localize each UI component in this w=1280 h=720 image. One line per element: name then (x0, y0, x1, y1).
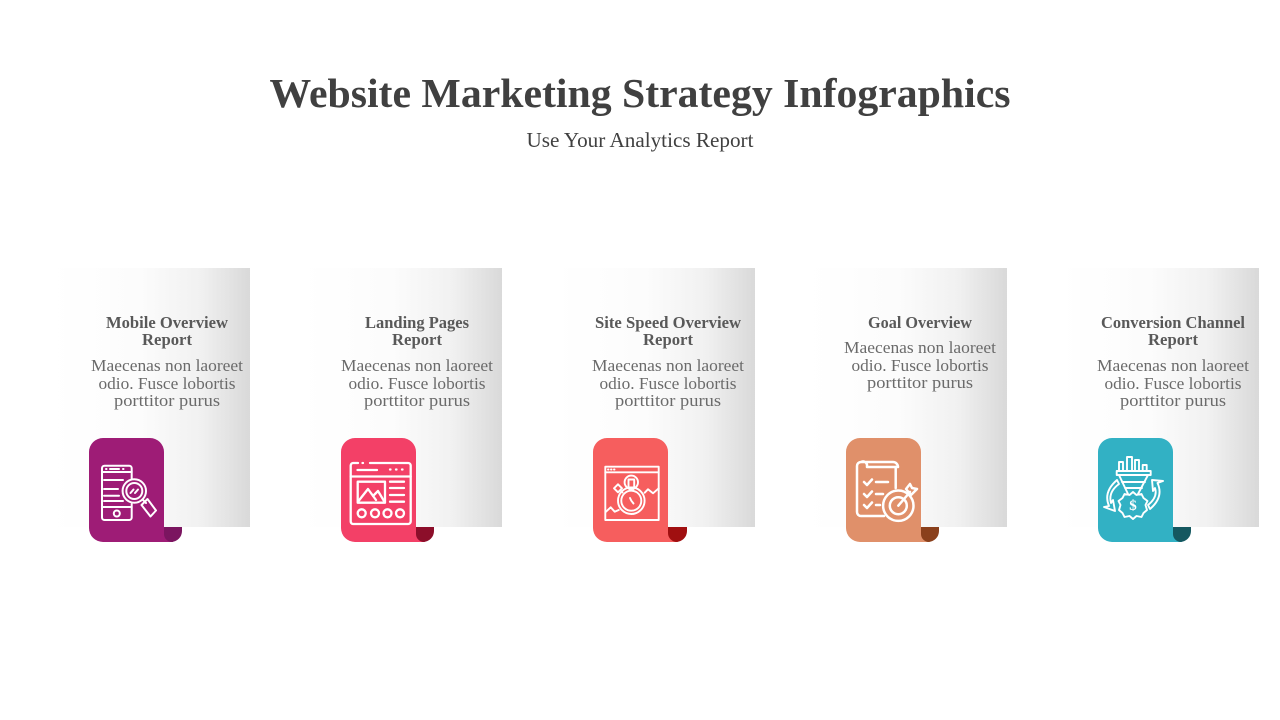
icon: checklist with target (857, 461, 917, 521)
curled tab (416, 527, 434, 542)
body text: Maecenas non laoreet (844, 338, 996, 357)
panel: site speed overview report (555, 268, 755, 542)
body text (341, 356, 493, 410)
heading (365, 313, 469, 349)
heading (106, 313, 229, 349)
body text: odio. Fusce lobortis (98, 374, 236, 393)
heading: Report (142, 330, 192, 349)
body text (592, 356, 744, 410)
body text: odio. Fusce lobortis (1104, 374, 1242, 393)
card (341, 438, 425, 542)
card (89, 438, 173, 542)
panel: goal overview (807, 268, 1007, 542)
heading: Landing Pages (365, 313, 469, 332)
icon: web page layout (351, 463, 411, 524)
body text: porttitor purus (867, 373, 973, 392)
panel background (1059, 268, 1259, 527)
icon: funnel with dollar gear: $ (1129, 498, 1137, 514)
icon: stopwatch on browser (605, 467, 659, 520)
panel background (555, 268, 755, 527)
curled tab (164, 527, 182, 542)
heading: Report (1148, 330, 1198, 349)
body text: Maecenas non laoreet (91, 356, 243, 375)
body text (1097, 356, 1249, 410)
curled tab (1173, 527, 1191, 542)
panel background (302, 268, 502, 527)
panel: conversion channel report (1059, 268, 1259, 542)
card (1098, 438, 1182, 542)
heading: Report (392, 330, 442, 349)
body text: Maecenas non laoreet (1097, 356, 1249, 375)
card (846, 438, 930, 542)
title: Website Marketing Strategy Infographics (270, 70, 1010, 116)
panel background (807, 268, 1007, 527)
body text: porttitor purus (364, 391, 470, 410)
body text: porttitor purus (1120, 391, 1226, 410)
body text: odio. Fusce lobortis (348, 374, 486, 393)
curled tab (921, 527, 939, 542)
body text: porttitor purus (114, 391, 220, 410)
icon: phone with magnifier (102, 466, 156, 520)
icon: funnel with dollar gear (1104, 457, 1163, 519)
panel: mobile overview report (50, 268, 250, 542)
panel: landing pages report (302, 268, 502, 542)
subtitle: Use Your Analytics Report (526, 128, 754, 152)
body text (844, 338, 996, 392)
body text: odio. Fusce lobortis (852, 356, 988, 375)
panel background (50, 268, 250, 527)
body text (91, 356, 243, 410)
body text: odio. Fusce lobortis (600, 374, 736, 393)
heading: Conversion Channel (1101, 313, 1245, 332)
heading: Goal Overview (868, 313, 973, 332)
heading: Mobile Overview (106, 313, 229, 332)
heading: Report (643, 330, 693, 349)
heading (1101, 313, 1245, 349)
heading (595, 313, 742, 349)
body text: Maecenas non laoreet (341, 356, 493, 375)
body text: Maecenas non laoreet (592, 356, 744, 375)
card (593, 438, 678, 542)
body text: porttitor purus (615, 391, 721, 410)
heading: Site Speed Overview (595, 313, 742, 332)
curled tab (668, 527, 687, 542)
